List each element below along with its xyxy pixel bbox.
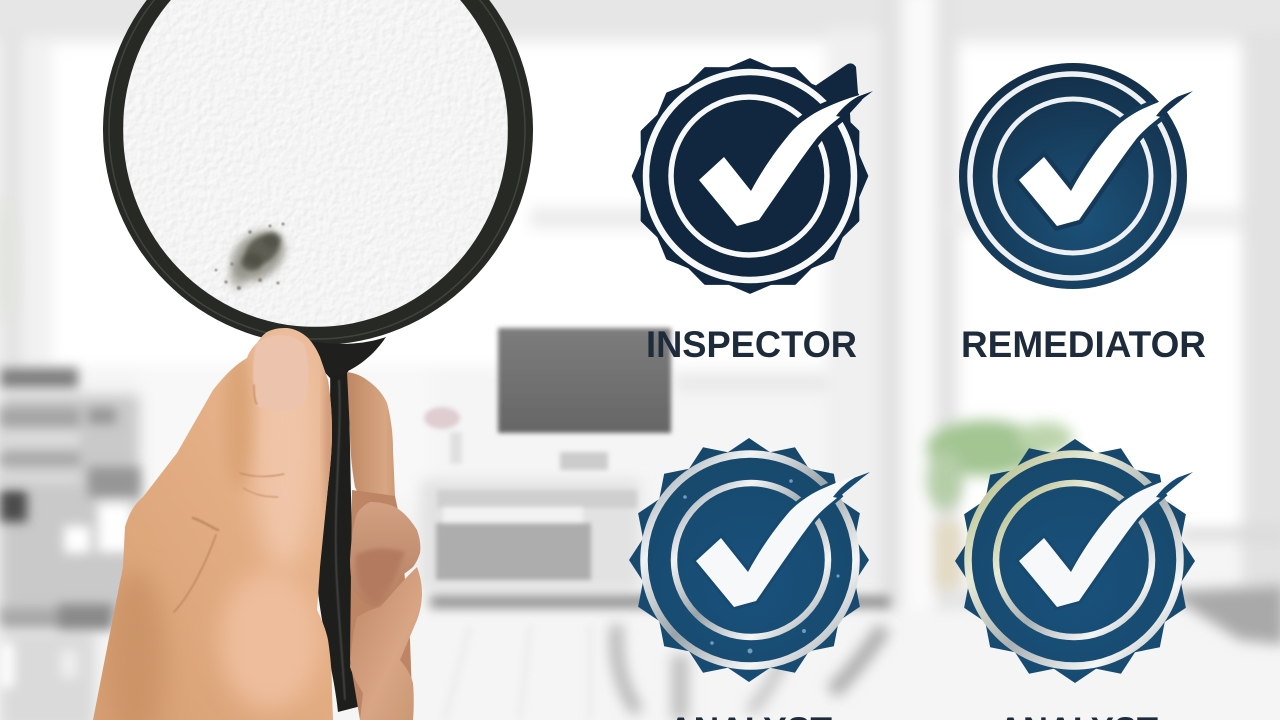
rings (646, 72, 871, 280)
rings (644, 454, 868, 666)
finger two (350, 502, 420, 607)
rings (968, 454, 1191, 666)
badge: analyst right (955, 439, 1195, 683)
check mark (1019, 473, 1191, 607)
check mark (699, 92, 871, 226)
finger base (350, 490, 413, 720)
finger three (350, 567, 422, 720)
tick backing (800, 63, 862, 150)
check tip (1156, 472, 1193, 498)
badge: analyst left (629, 438, 870, 682)
handle highlight (336, 380, 345, 700)
finger one (347, 372, 395, 500)
check tip (1156, 91, 1193, 117)
check mark (696, 473, 868, 607)
badge: inspector (634, 60, 873, 292)
rings (970, 74, 1191, 278)
finger two shade (356, 549, 405, 604)
label: remediator: REMEDIATOR (961, 324, 1206, 365)
skin creases (174, 385, 284, 612)
handle neck (295, 337, 386, 378)
lens paper surface (123, 0, 508, 327)
label: inspector: INSPECTOR (646, 324, 857, 365)
lens frame (103, 0, 533, 345)
sparkles (683, 479, 840, 654)
magnifying glass with mold spot (103, 0, 533, 712)
hand shading (105, 330, 336, 720)
badge: remediator (959, 63, 1193, 289)
check mark (1019, 92, 1191, 226)
fingers behind (347, 372, 422, 720)
mold spot (215, 220, 295, 292)
check tip (836, 91, 873, 117)
hand holding the magnifier (93, 328, 422, 720)
palm and thumb (93, 328, 333, 720)
handle (316, 368, 361, 712)
check tip (833, 472, 870, 498)
thumb nail (253, 335, 308, 410)
